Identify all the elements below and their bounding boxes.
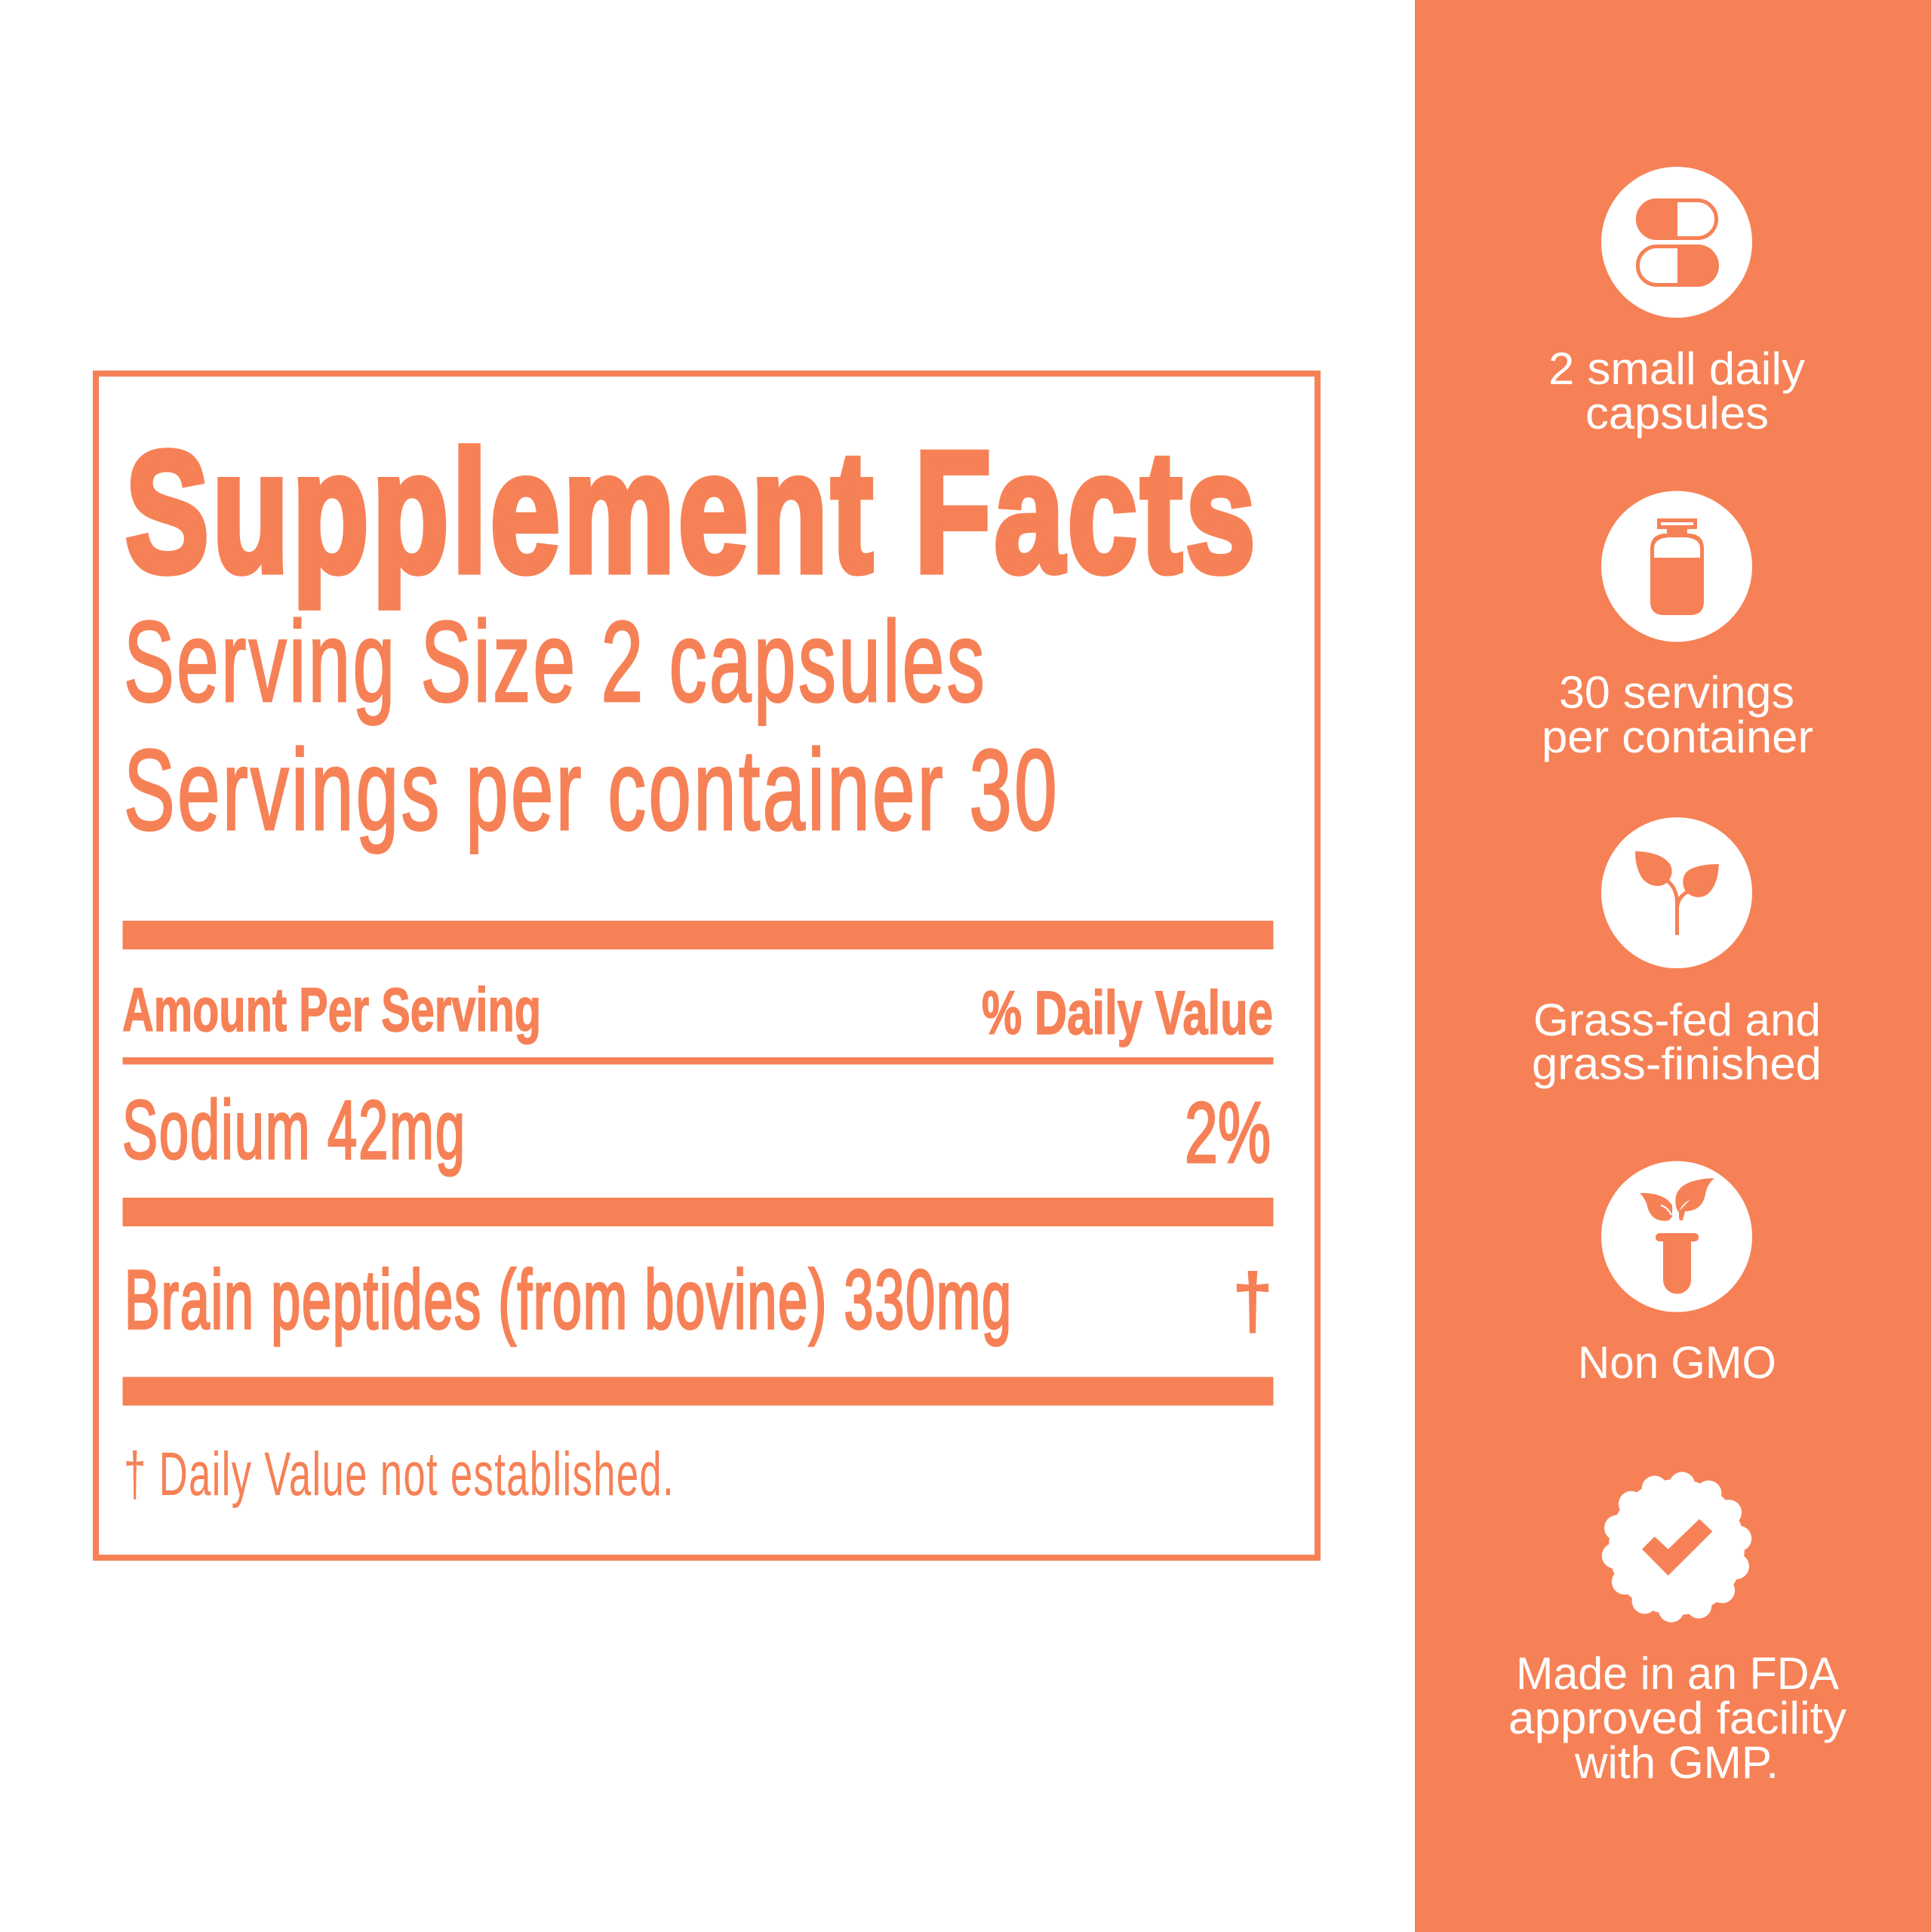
icon: test tube with leaves bbox=[1601, 1161, 1752, 1312]
sodium row: Sodium 42mg bbox=[122, 1084, 466, 1177]
icon: sprout bbox=[1601, 817, 1752, 968]
icon: bottle bbox=[1601, 491, 1752, 641]
panel: benefits sidebar bbox=[1415, 0, 1931, 1932]
text: made in an FDA approved facility with GMP: with GMP. bbox=[1574, 1737, 1779, 1788]
dagger mark: † bbox=[1233, 1259, 1272, 1343]
serving size: Serving Size 2 capsules bbox=[124, 598, 987, 726]
title: Supplement Facts bbox=[125, 417, 1259, 608]
text: made in an FDA approved facility with GMP: Made in an FDA bbox=[1516, 1648, 1839, 1699]
text: non GMO: Non GMO bbox=[1578, 1337, 1776, 1388]
text: 2 small daily capsules: 2 small daily bbox=[1548, 343, 1805, 394]
divider bar bottom bbox=[122, 1377, 1274, 1405]
text: grass-fed and grass-finished: grass-finished bbox=[1532, 1038, 1822, 1089]
label border bbox=[96, 374, 1318, 1558]
amount per serving heading: Amount Per Serving bbox=[122, 976, 541, 1044]
text: 2 small daily capsules: capsules bbox=[1585, 388, 1769, 438]
footnote: † Daily Value not established. bbox=[124, 1440, 675, 1509]
text: made in an FDA approved facility with GMP bbox=[1508, 1648, 1846, 1788]
text: grass-fed and grass-finished bbox=[1532, 995, 1822, 1089]
sodium percent: 2% bbox=[1185, 1085, 1271, 1181]
divider bar top bbox=[122, 921, 1274, 949]
sidebar background bbox=[1415, 0, 1931, 1932]
divider bar middle bbox=[122, 1198, 1274, 1226]
text: 30 servings per container bbox=[1542, 667, 1813, 762]
daily value heading: % Daily Value bbox=[982, 979, 1273, 1048]
brain peptides row: Brain peptides (from bovine) 330mg bbox=[125, 1254, 1013, 1346]
panel: supplement facts label bbox=[96, 374, 1318, 1558]
servings per container: Servings per container 30 bbox=[124, 726, 1059, 854]
icon: quality badge bbox=[1602, 1472, 1751, 1623]
text: 30 servings per container: 30 servings bbox=[1559, 667, 1794, 718]
icon: capsules bbox=[1601, 167, 1752, 318]
text: grass-fed and grass-finished: Grass-fed and bbox=[1533, 995, 1821, 1045]
text: 2 small daily capsules bbox=[1548, 343, 1805, 438]
thin divider bbox=[122, 1057, 1274, 1064]
text: 30 servings per container: per container bbox=[1542, 712, 1813, 762]
text: made in an FDA approved facility with GMP: approved facility bbox=[1508, 1693, 1846, 1743]
